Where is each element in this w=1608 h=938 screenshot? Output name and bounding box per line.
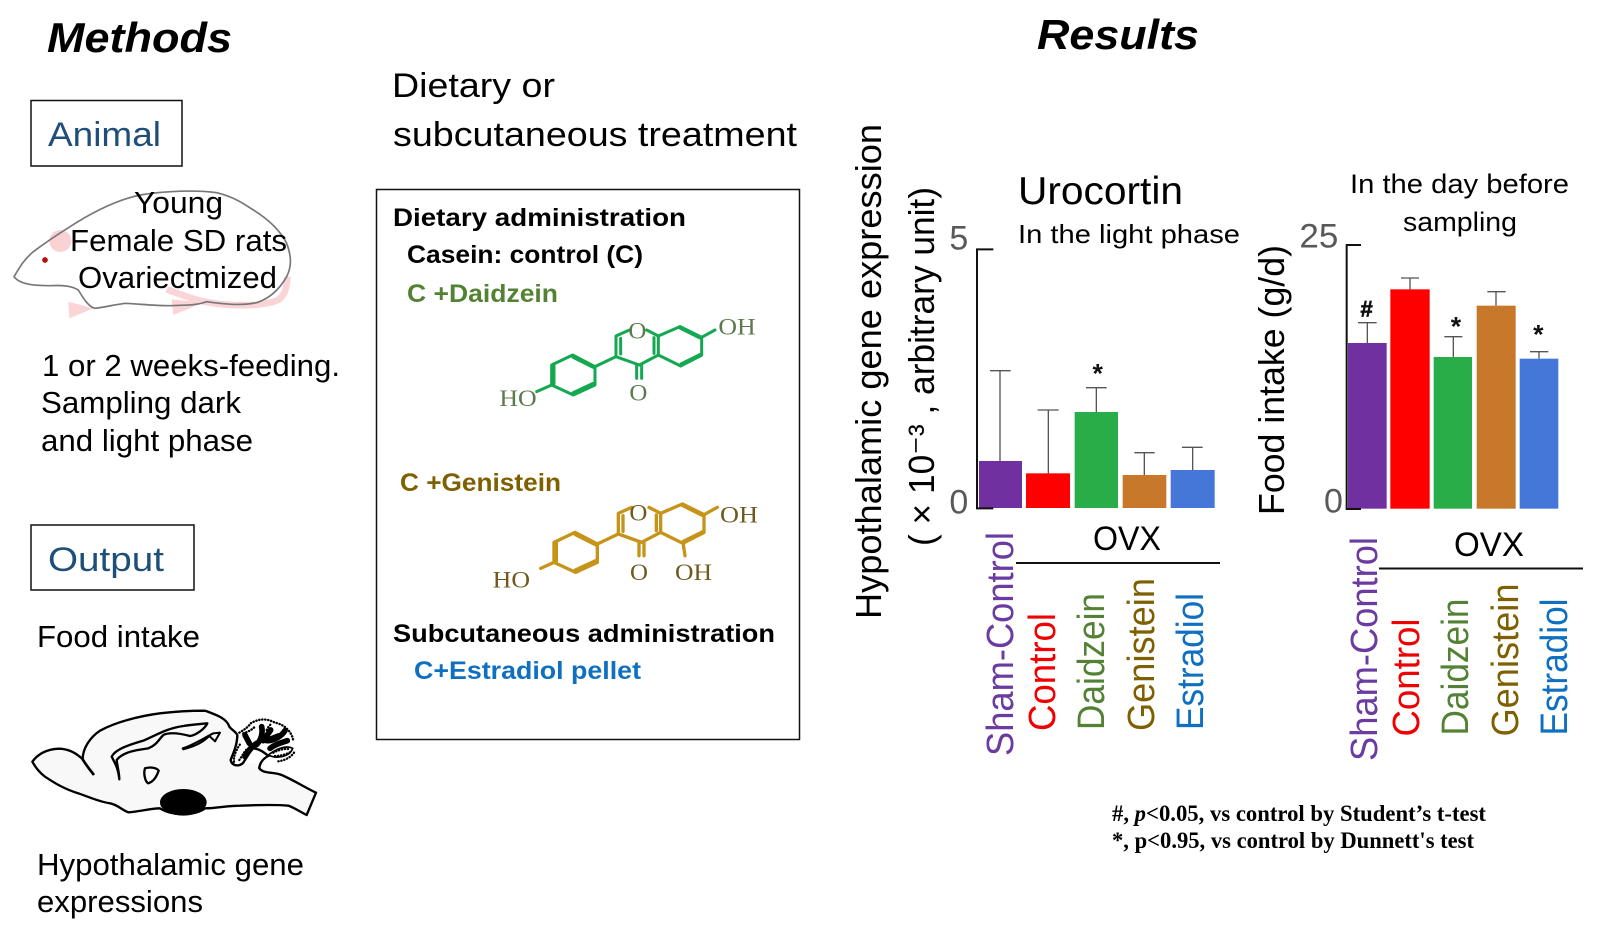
text: rat description: Female SD rats	[70, 223, 287, 258]
title: Methods: Methods	[47, 14, 232, 61]
footnote: statistics	[1112, 801, 1486, 853]
bar chart: urocortin	[949, 219, 1215, 521]
x labels: urocortin chart: Control	[1022, 613, 1064, 731]
x labels: food intake chart: OVX	[1454, 526, 1524, 564]
x labels: food intake chart: Sham-Control	[1344, 537, 1386, 761]
text: casein control: Casein: control (C)	[407, 241, 643, 269]
heading: Urocortin: Urocortin	[1018, 170, 1183, 213]
x labels: urocortin chart: Daidzein	[1071, 593, 1113, 730]
x labels: urocortin chart: Genistein	[1121, 578, 1163, 731]
error bars	[1358, 278, 1548, 359]
heading: in the day before sampling: In the day before	[1350, 169, 1569, 199]
heading: treatment: Dietary or	[392, 67, 555, 105]
bar chart: food intake	[1299, 217, 1558, 520]
icon: daidzein structure: OH	[718, 314, 756, 340]
icon: daidzein structure: O	[628, 318, 646, 344]
heading: Urocortin: In the light phase	[1018, 219, 1240, 249]
text: C + Genistein: C +Genistein	[400, 469, 561, 497]
y axis title: hypothalamic gene expression: Hypothalamic gene expression	[848, 124, 889, 619]
icon: daidzein structure: O	[629, 381, 647, 407]
icon: genistein structure: OH	[720, 503, 758, 529]
significance marker: *	[1092, 359, 1103, 389]
text: feeding and sampling	[41, 348, 340, 458]
x labels: urocortin chart: OVX	[1093, 520, 1161, 558]
x labels: food intake chart: Daidzein	[1435, 598, 1477, 736]
x labels: urocortin chart: Estradiol	[1170, 593, 1212, 730]
icon: daidzein structure	[499, 314, 756, 412]
text: subcutaneous administration: Subcutaneous administration	[393, 620, 775, 648]
tick labels: 25	[1299, 217, 1338, 255]
title: Results: Results	[1037, 11, 1199, 58]
x labels: food intake chart: Estradiol	[1534, 598, 1576, 736]
tick labels	[1299, 217, 1343, 520]
panel: Animal label	[31, 100, 182, 166]
text: C + Daidzein: C +Daidzein	[407, 280, 558, 308]
text: feeding and sampling: 1 or 2 weeks-feeding.	[42, 348, 340, 383]
tick labels: 5	[949, 219, 968, 257]
tick labels	[949, 219, 968, 521]
text: feeding and sampling: and light phase	[41, 423, 253, 458]
text: feeding and sampling: Sampling dark	[41, 385, 242, 420]
significance markers: *	[1533, 320, 1544, 350]
axis	[977, 249, 993, 508]
text: Hypothalamic gene expressions: expressions	[37, 884, 203, 919]
heading: Urocortin	[1018, 170, 1240, 249]
heading: in the day before sampling: sampling	[1403, 207, 1517, 237]
panel: administration box	[376, 190, 800, 740]
icon: genistein structure: O	[630, 560, 648, 586]
icon: genistein structure	[493, 501, 758, 593]
text: rat description: Young	[134, 185, 223, 220]
x labels: urocortin chart	[980, 520, 1220, 756]
panel: Output label	[31, 525, 194, 590]
panel: Animal label: Animal	[48, 116, 161, 154]
tick labels: 0	[949, 483, 968, 521]
bars	[979, 412, 1215, 508]
y axis title: food intake: Food intake (g/d)	[1251, 245, 1292, 515]
x labels: food intake chart: Genistein	[1485, 584, 1527, 736]
panel: Output label: Output	[48, 541, 165, 579]
text: dietary administration: Dietary administration	[393, 204, 686, 232]
y axis title: hypothalamic gene expression: ( × 10⁻³ , arbitrary unit)	[901, 187, 942, 546]
axis	[1347, 245, 1361, 509]
heading: treatment	[392, 67, 798, 154]
icon: rat brain	[32, 711, 316, 816]
cerebellum folia	[231, 718, 295, 768]
x labels: urocortin chart: Sham-Control	[980, 532, 1022, 756]
text: C + Estradiol pellet: C+Estradiol pellet	[414, 657, 642, 685]
tick labels: 0	[1324, 482, 1343, 520]
text: Hypothalamic gene expressions	[37, 847, 304, 919]
icon: genistein structure: HO	[493, 567, 530, 593]
significance markers	[1361, 297, 1544, 350]
text: rat description: Ovariectmized	[78, 260, 277, 295]
icon: genistein structure: O	[629, 501, 647, 527]
text: Food intake: Food intake	[37, 619, 200, 654]
footnote: statistics: #, p<0.05, vs control by Student’s t-test	[1112, 801, 1486, 826]
text: Hypothalamic gene expressions: Hypothalamic gene	[37, 847, 304, 882]
error bars	[990, 371, 1203, 475]
heading: in the day before sampling	[1350, 169, 1569, 237]
significance markers: *	[1451, 311, 1462, 341]
icon: daidzein structure: HO	[499, 386, 537, 412]
icon: rat	[14, 191, 290, 318]
bars	[1348, 289, 1558, 509]
text: rat description	[70, 185, 287, 295]
icon: genistein structure: OH	[675, 560, 712, 586]
heading: treatment: subcutaneous treatment	[393, 116, 798, 154]
x labels: food intake chart: Control	[1386, 618, 1428, 736]
y axis title: hypothalamic gene expression	[848, 124, 942, 619]
x labels: food intake chart	[1344, 526, 1583, 761]
footnote: statistics: *, p<0.95, vs control by Dunnett's test	[1112, 828, 1474, 853]
significance markers: #	[1361, 297, 1373, 322]
